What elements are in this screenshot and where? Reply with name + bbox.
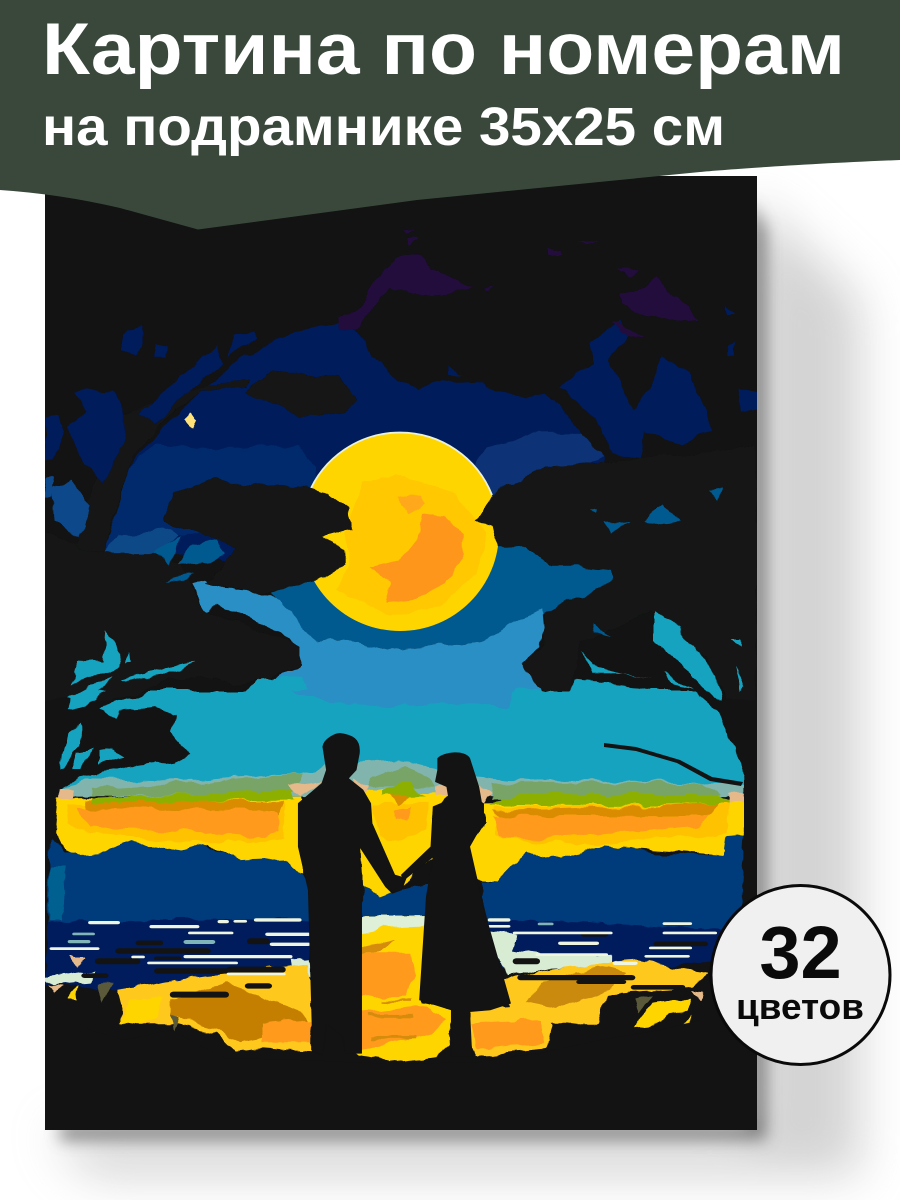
foreground ground xyxy=(45,950,760,1130)
man xyxy=(298,733,406,1055)
purple foliage xyxy=(338,228,699,338)
header banner xyxy=(0,0,900,230)
left sky gaps xyxy=(45,327,256,483)
navy hills centre xyxy=(362,883,428,918)
yellow sunset left xyxy=(53,797,302,873)
subtitle: на подрамнике 35х25 см xyxy=(42,97,725,157)
orange shore left xyxy=(263,1020,311,1043)
dark water right xyxy=(488,918,740,967)
left turquoise leaves xyxy=(68,630,195,700)
gold shore left xyxy=(120,963,311,1052)
dark water left xyxy=(47,919,313,988)
canvas shadow xyxy=(50,195,860,1175)
reflection column xyxy=(347,917,451,1062)
yellow sunset centre xyxy=(358,790,449,897)
olive specks xyxy=(97,982,653,1032)
reflection top xyxy=(361,917,426,933)
yellow sunset right xyxy=(467,802,744,880)
navy hills left xyxy=(47,840,313,923)
woman xyxy=(401,753,510,1057)
right tree branch xyxy=(604,743,743,786)
couple silhouette xyxy=(298,733,510,1057)
left lower gaps xyxy=(45,477,93,538)
sky layers xyxy=(104,322,613,703)
badge number: 32 xyxy=(759,911,842,994)
white streaks xyxy=(50,918,717,975)
badge label: цветов xyxy=(736,986,864,1027)
navy hills right xyxy=(481,835,744,932)
mid-blue leaf gaps xyxy=(152,485,722,637)
title: Картина по номерам xyxy=(42,9,845,90)
reflection orange xyxy=(349,953,445,1052)
orange shore right xyxy=(472,1020,545,1048)
small dark foliage xyxy=(245,370,358,418)
right sky gaps xyxy=(445,305,757,460)
right foliage mass xyxy=(474,447,757,700)
black streaks xyxy=(81,933,708,998)
gold shore right xyxy=(470,960,708,1057)
pale water right xyxy=(488,930,613,977)
green bands xyxy=(90,765,722,800)
hill side tint xyxy=(49,870,65,920)
bright orange xyxy=(79,807,713,838)
moon inner tones xyxy=(336,473,488,617)
moon xyxy=(301,433,499,631)
left branch xyxy=(77,382,249,553)
left foliage mass xyxy=(80,551,302,692)
tree silhouettes and leaf gaps xyxy=(45,228,757,700)
right turquoise leaves xyxy=(558,613,744,700)
blue sky strip xyxy=(290,690,513,707)
pale water left xyxy=(45,970,95,985)
right canvas edge xyxy=(744,780,758,1130)
star xyxy=(186,413,197,427)
peach highlights xyxy=(59,778,745,804)
lake, sunset bands and hills xyxy=(45,690,745,1062)
dark gold left xyxy=(172,983,308,1043)
moon rim highlight xyxy=(308,433,492,495)
turquoise sky xyxy=(59,690,744,793)
left cloud of foliage xyxy=(163,478,352,592)
left teal leaves xyxy=(59,690,124,770)
water streaks xyxy=(50,918,717,998)
grey-blue streaks xyxy=(68,923,554,944)
tan specks xyxy=(50,955,703,1002)
yellow grass tips xyxy=(68,987,690,1028)
badge: colour count xyxy=(711,886,890,1064)
reflection dark bits xyxy=(358,938,417,1038)
dark gold right xyxy=(526,967,626,1010)
dark orange xyxy=(84,793,717,816)
lime bands xyxy=(90,783,735,805)
painting canvas xyxy=(45,176,760,1130)
deeper yellow xyxy=(65,802,731,847)
pale haze xyxy=(63,760,744,797)
